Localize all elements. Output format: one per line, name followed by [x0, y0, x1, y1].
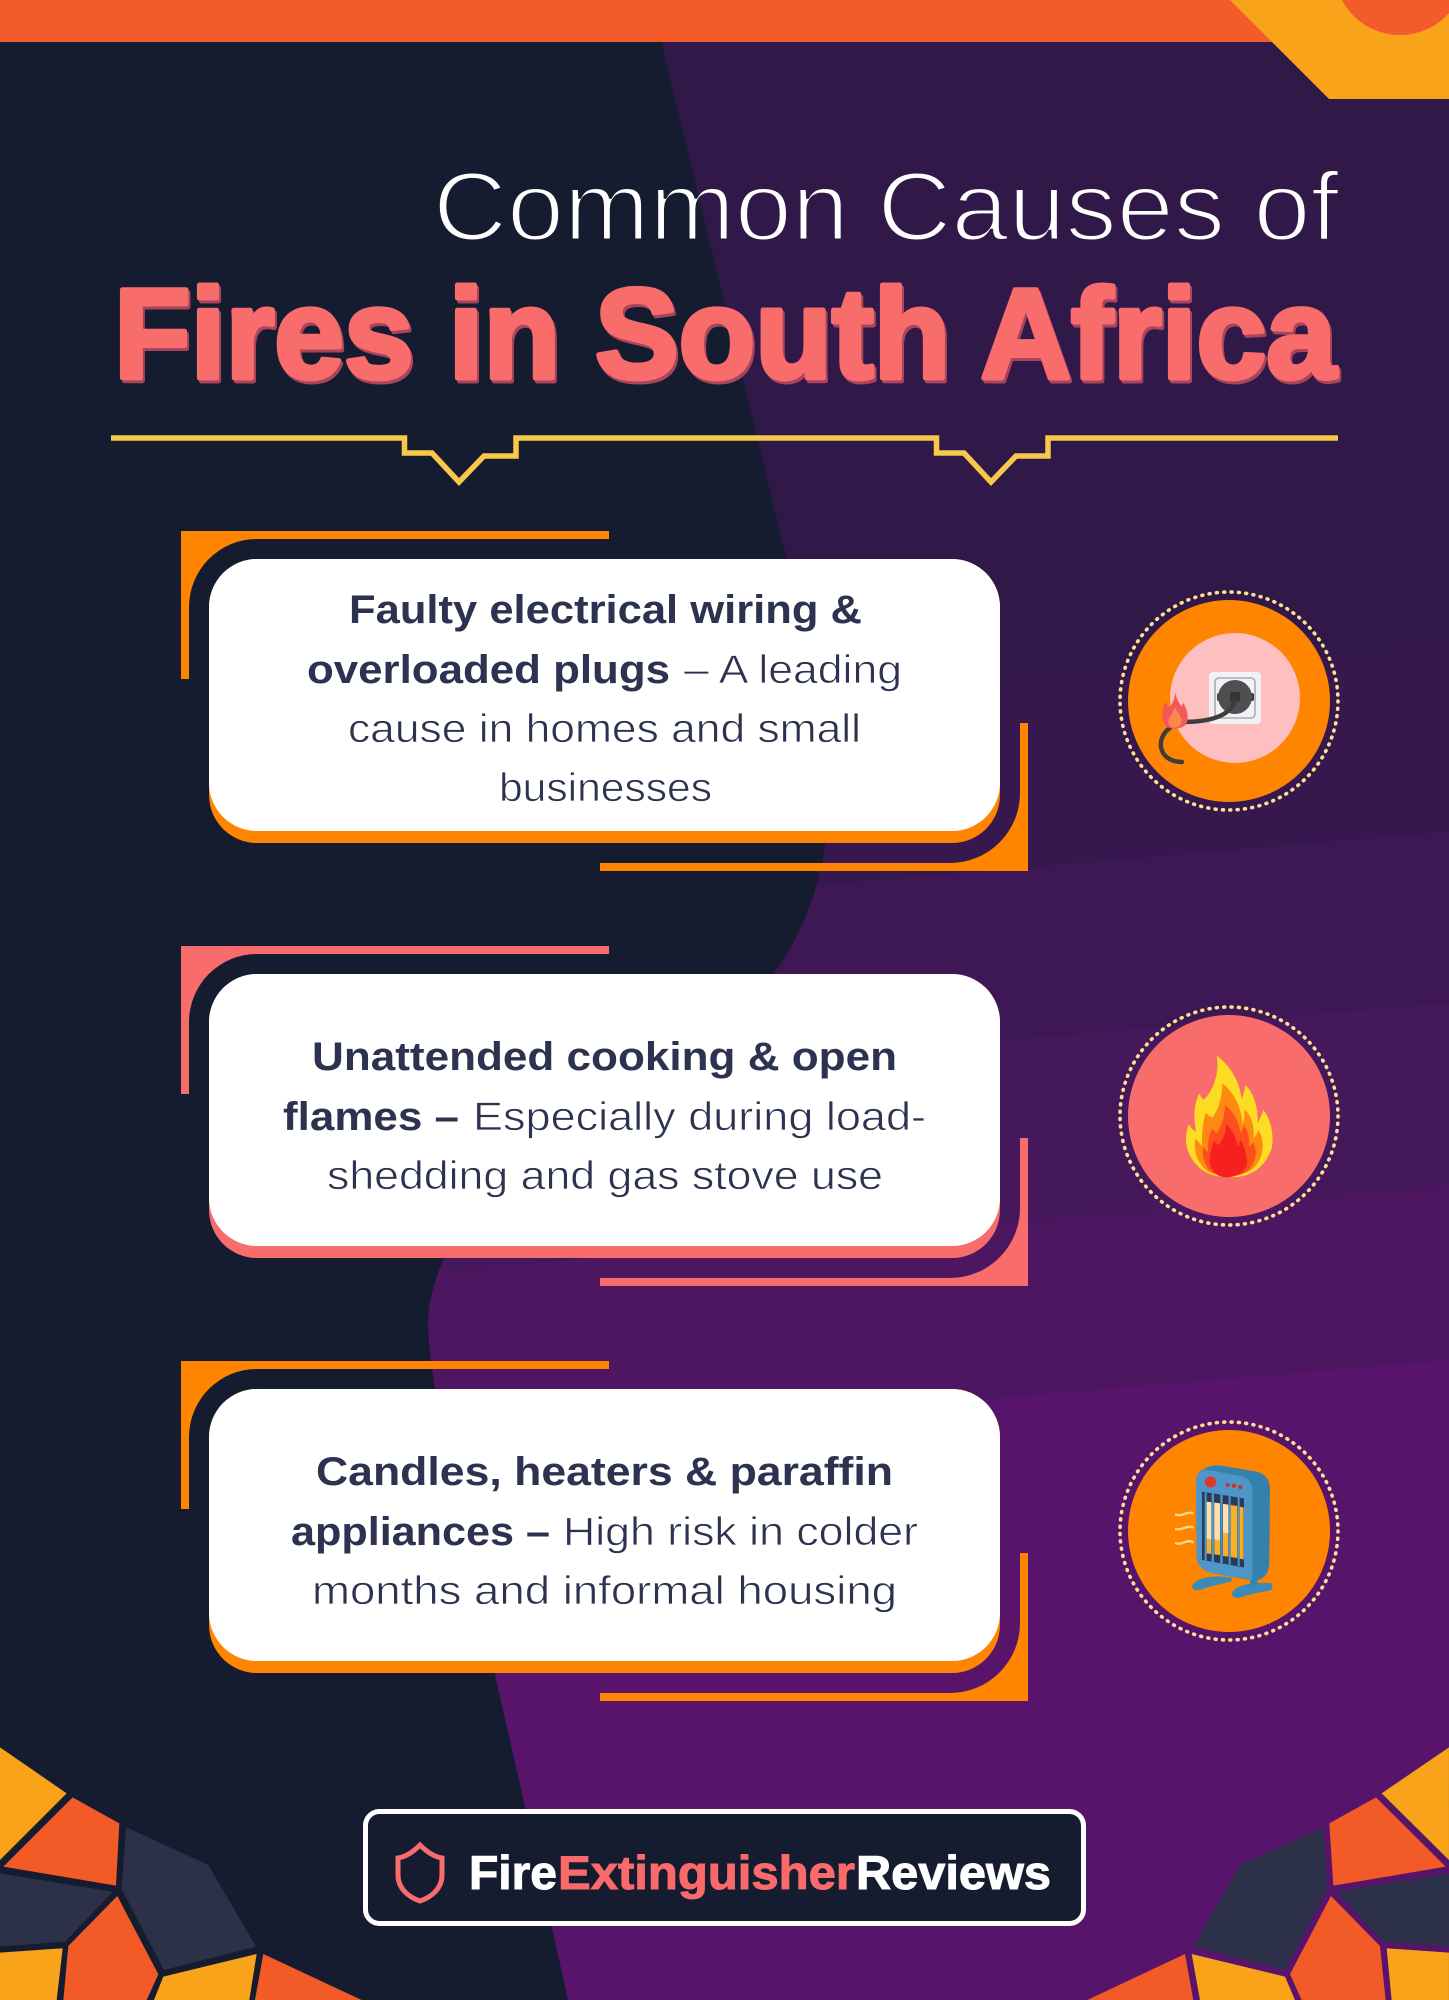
background: dark navy blob: [0, 0, 827, 2000]
card 3 text: [291, 1450, 918, 1613]
card 2 text: shedding and gas stove use: [327, 1154, 883, 1198]
ring 3: [1120, 1422, 1338, 1640]
card 3 face: [209, 1389, 1000, 1661]
icon: plug and outlet on fire: [1120, 592, 1338, 810]
title line 1: Common Causes of: [433, 152, 1340, 261]
card 2 top-left frame: [181, 946, 609, 1094]
title: [114, 152, 1340, 406]
card 3 base: [209, 1389, 1000, 1673]
icon: electric heater: [1120, 1422, 1338, 1640]
card 2 text: Unattended cooking & open: [312, 1035, 897, 1079]
card 1 text: businesses: [499, 766, 712, 810]
card 1 base: [209, 559, 1000, 843]
orange disc 1: [1128, 600, 1330, 802]
card 1 bottom-right frame: [600, 723, 1028, 871]
title divider with notches: [111, 438, 1338, 482]
ring 2: [1120, 1007, 1338, 1225]
card 3 text: appliances –: [291, 1510, 550, 1554]
card 3 bottom-right frame: [600, 1553, 1028, 1701]
logo wordmark: [469, 1846, 1051, 1899]
logo wordmark: Fire: [469, 1846, 557, 1899]
card 1 top-left frame: [181, 531, 609, 679]
card 3 text: High risk in colder: [563, 1510, 918, 1554]
panel: card 1 electrical wiring: [181, 531, 1028, 871]
bottom left polygon cluster: [0, 1747, 362, 2000]
card 2 base: [209, 974, 1000, 1258]
coral disc: [1128, 1015, 1330, 1217]
pink inner disc: [1170, 633, 1300, 763]
card 1 text: [307, 588, 902, 810]
card 2 bottom-right frame: [600, 1138, 1028, 1286]
logo badge: [366, 1812, 1084, 1924]
card 2 face: [209, 974, 1000, 1246]
card 2 text: flames –: [283, 1095, 459, 1139]
logo wordmark: Extinguisher: [558, 1846, 855, 1899]
small flame: [1162, 692, 1188, 729]
card 1 text: – A leading: [684, 648, 902, 692]
bottom right polygon cluster: [1087, 1747, 1449, 2000]
card 1 text: cause in homes and small: [348, 707, 861, 751]
card 2 text: [283, 1035, 926, 1198]
card 3 text: Candles, heaters & paraffin: [316, 1450, 893, 1494]
flame layers: [1186, 1056, 1273, 1177]
outlet: [1209, 672, 1261, 724]
logo wordmark: Reviews: [856, 1846, 1051, 1899]
card 2 text: Especially during load-: [473, 1095, 926, 1139]
top orange bar: [0, 0, 1300, 42]
icon: flame: [1120, 1007, 1338, 1225]
card 1 face: [209, 559, 1000, 831]
card 3 text: months and informal housing: [312, 1569, 897, 1613]
panel: card 3 heaters: [181, 1361, 1028, 1701]
panel: card 2 cooking: [181, 946, 1028, 1286]
card 1 text: Faulty electrical wiring &: [349, 588, 862, 632]
logo box: [366, 1812, 1084, 1924]
cord: [1161, 700, 1235, 762]
card 3 top-left frame: [181, 1361, 609, 1509]
heater drawing: [1176, 1465, 1272, 1598]
title line 2: Fires in South Africa: [114, 263, 1337, 406]
icon: shield: [398, 1845, 442, 1901]
ring 1: [1120, 592, 1338, 810]
orange disc 3: [1128, 1430, 1330, 1632]
top right corner shape: [1230, 0, 1449, 99]
card 1 text: overloaded plugs: [307, 648, 670, 692]
